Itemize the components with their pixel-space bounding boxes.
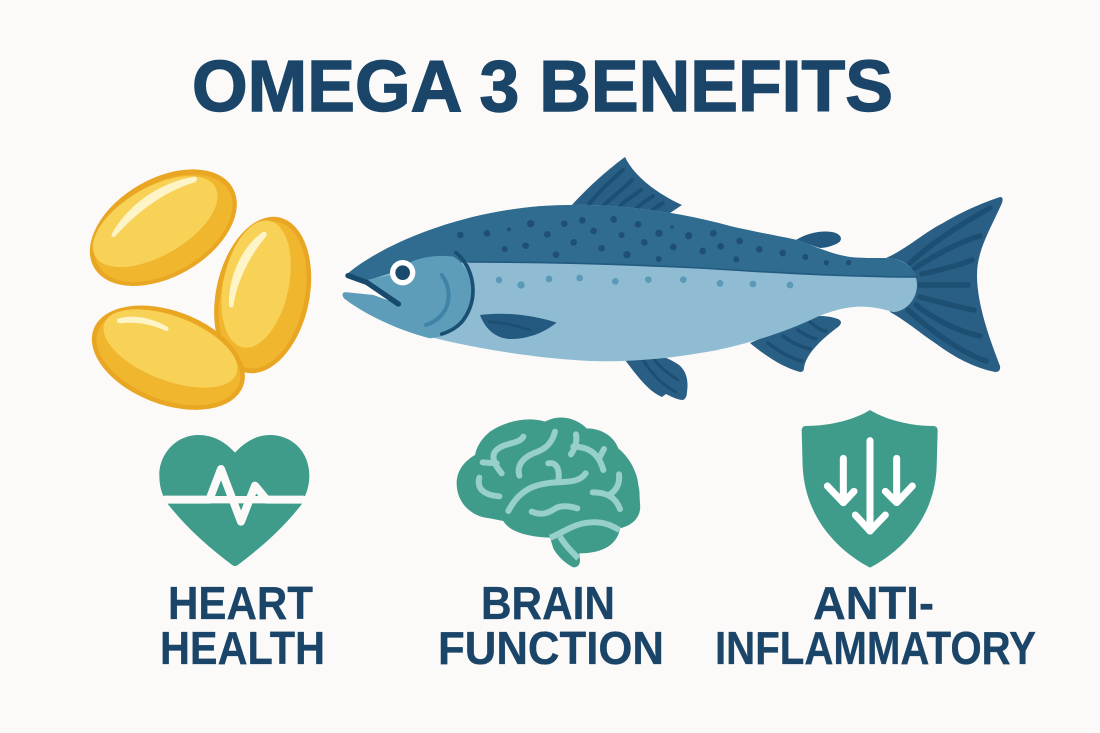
fish rear spots: [733, 238, 851, 265]
fish body belly: [343, 205, 917, 361]
capsule: bottom left: [77, 285, 260, 430]
fish tail: [886, 197, 1003, 372]
gill cover line: [442, 253, 473, 334]
lateral line: [468, 262, 917, 277]
fish pale lateral dots: [496, 275, 793, 289]
eye: [390, 260, 415, 285]
ventral fin: [625, 354, 688, 400]
illustration: salmon: [342, 157, 1003, 400]
label: anti-inflammatory: INFLAMMATORY: [715, 622, 1036, 674]
label: anti-inflammatory: [715, 577, 1036, 674]
icon: heart with pulse: [159, 435, 309, 566]
icon: omega 3 capsules: [70, 145, 325, 430]
title: OMEGA 3 BENEFITS: [192, 47, 893, 127]
mouth line: [348, 276, 398, 304]
fish spots: [457, 216, 724, 262]
gill arc: [426, 275, 449, 325]
label: heart health: [160, 577, 325, 674]
label: brain function: [438, 577, 664, 674]
label: brain function: FUNCTION: [438, 622, 664, 674]
label: brain function: BRAIN: [481, 577, 615, 629]
anal fin: [750, 316, 841, 372]
fish head: [342, 253, 473, 338]
capsule: right: [201, 208, 325, 382]
dorsal fin: [572, 157, 682, 213]
pectoral fin: [480, 314, 557, 339]
capsule: top left: [70, 145, 257, 310]
adipose fin: [796, 231, 841, 248]
label: heart health: HEALTH: [160, 622, 325, 674]
label: heart health: HEART: [168, 577, 313, 629]
icon: shield with down arrows: [802, 410, 938, 568]
fish back: [346, 205, 917, 281]
label: anti-inflammatory: ANTI-: [813, 577, 934, 629]
icon: brain: [457, 417, 640, 567]
